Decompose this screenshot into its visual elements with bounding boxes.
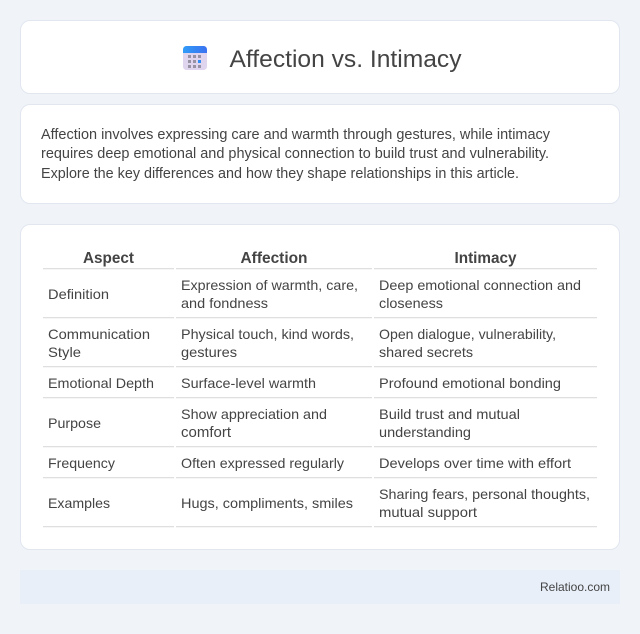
table header bbox=[83, 250, 517, 267]
row: definition: closeness bbox=[379, 295, 443, 311]
row: frequency: Develops over time with effort bbox=[379, 455, 571, 471]
table header: Affection bbox=[240, 250, 308, 267]
panel: title card bbox=[20, 20, 620, 94]
table header: Intimacy bbox=[454, 250, 517, 267]
row: examples: Hugs, compliments, smiles bbox=[181, 495, 353, 511]
row: frequency: Often expressed regularly bbox=[181, 455, 344, 471]
title: Affection vs. Intimacy bbox=[230, 46, 462, 73]
row: definition: and fondness bbox=[181, 295, 268, 311]
row: examples: Examples bbox=[48, 495, 110, 511]
row: definition: Expression of warmth, care, bbox=[181, 277, 358, 293]
row: purpose: Purpose bbox=[48, 415, 101, 431]
row: examples: Sharing fears, personal thoughts, bbox=[379, 486, 590, 502]
row: definition bbox=[48, 277, 581, 311]
table header: Aspect bbox=[83, 250, 135, 267]
intro text: Affection involves expressing care and warmth through gestures, while intimacy bbox=[41, 127, 551, 143]
intro text: requires deep emotional and physical connection to build trust and vulnerability. bbox=[41, 146, 549, 162]
row: purpose: Build trust and mutual bbox=[379, 406, 520, 422]
footer credit: Relatioo.com bbox=[540, 580, 610, 594]
row: definition: Deep emotional connection and bbox=[379, 277, 581, 293]
table row rules bbox=[43, 268, 597, 527]
icon: calendar bbox=[183, 46, 207, 70]
row: communication style: Physical touch, kind words, bbox=[181, 326, 354, 342]
comparison table bbox=[43, 250, 597, 527]
panel: footer bar bbox=[20, 570, 620, 604]
intro text: Explore the key differences and how they shape relationships in this article. bbox=[41, 166, 519, 182]
intro text bbox=[41, 127, 551, 182]
panel: table card bbox=[20, 224, 620, 550]
panel: intro card bbox=[20, 104, 620, 204]
row: purpose bbox=[48, 406, 520, 441]
row: communication style: shared secrets bbox=[379, 344, 473, 360]
row: communication style bbox=[48, 326, 556, 360]
row: purpose: comfort bbox=[181, 424, 232, 441]
row: communication style: Style bbox=[48, 344, 81, 360]
row: purpose: understanding bbox=[379, 424, 471, 440]
row: emotional depth bbox=[48, 375, 561, 391]
row: frequency bbox=[48, 455, 571, 471]
row: emotional depth: Emotional Depth bbox=[48, 375, 154, 391]
row: examples bbox=[48, 486, 590, 520]
row: emotional depth: Profound emotional bonding bbox=[379, 375, 561, 391]
row: communication style: Communication bbox=[48, 326, 150, 342]
row: communication style: Open dialogue, vulnerability, bbox=[379, 326, 556, 342]
row: purpose: Show appreciation and bbox=[181, 406, 327, 422]
row: emotional depth: Surface-level warmth bbox=[181, 375, 316, 391]
row: examples: mutual support bbox=[379, 504, 477, 520]
row: frequency: Frequency bbox=[48, 455, 115, 471]
row: definition: Definition bbox=[48, 286, 109, 302]
row: communication style: gestures bbox=[181, 344, 237, 360]
